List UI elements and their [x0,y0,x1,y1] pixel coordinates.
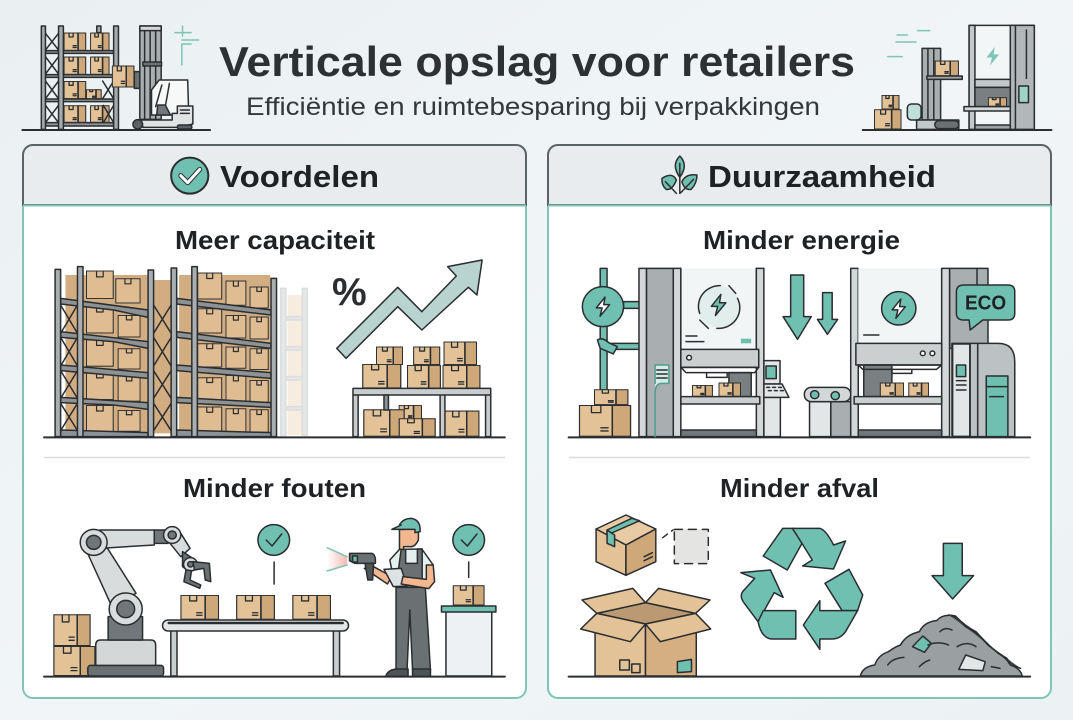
callout: ECO: ECO [965,293,1006,314]
illustration: checked parcel on pedestal [44,525,505,677]
panel: Voordelen [23,145,526,698]
panel: Duurzaamheid [548,145,1051,698]
illustration: loaded racks [44,267,505,437]
illustration: ECO control cabinet [952,343,1015,437]
illustration: lift machine one [639,268,789,437]
panel frame [23,145,526,698]
illustration: lift machine two [851,268,988,437]
icon: percent: % [332,271,367,314]
subheading: Minder energie: Minder energie [703,225,900,255]
icon: recycling symbol [741,528,863,649]
subheading: Minder fouten: Minder fouten [183,473,366,503]
heading: Voordelen: Voordelen [220,159,379,194]
arrows: reduced energy [783,275,838,339]
illustration: worker with scanner [327,518,435,677]
illustration: open cardboard box [581,588,711,676]
illustration: waste pile [569,615,1030,677]
illustration: boxes on table [353,342,491,437]
illustration: conveyor with boxes and check [163,525,349,676]
arrow: down to waste pile [932,543,974,599]
illustration: robot arm [53,527,211,676]
icon: check circle [171,158,208,194]
icon: leaves [662,156,697,193]
subheading: Meer capaciteit: Meer capaciteit [175,225,375,255]
illustration: automated vertical lift with stacker [863,25,1051,130]
subtitle: Efficiëntie en ruimtebesparing bij verpakkingen [246,93,820,121]
callout: ECO [956,285,1015,330]
title: Verticale opslag voor retailers [219,38,855,85]
heading: Duurzaamheid: Duurzaamheid [708,159,936,194]
subheading: Minder afval: Minder afval [720,473,879,503]
chart arrow: rising capacity [337,260,482,358]
illustration: compact box and empty space [596,515,708,575]
illustration: warehouse rack with forklift [22,26,210,130]
illustration: energy supply pipe and parcels [569,268,1030,437]
illustration: conveyor rollers [804,387,851,437]
panel frame [548,145,1051,698]
